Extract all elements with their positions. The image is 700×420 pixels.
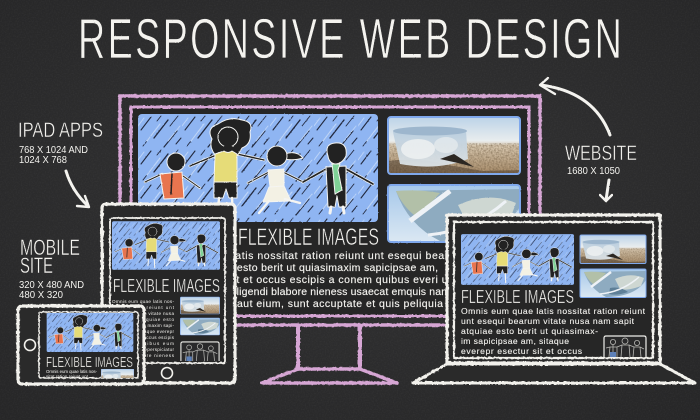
laptop heading: FLEXIBLE IMAGES (461, 287, 574, 307)
label: website: 1680 X 1050 (567, 166, 620, 177)
tablet body text: Omnis eum quae latis nos- (112, 299, 174, 304)
tablet people frame (181, 342, 219, 361)
tablet body text: ligendi blabore nieness (112, 353, 175, 358)
label: iPad apps (18, 119, 103, 166)
label: iPad apps: 1024 X 768 (19, 155, 67, 166)
phone body text (46, 369, 98, 379)
title: RESPONSIVE WEB DESIGN (78, 7, 622, 71)
monitor frame and stand (120, 96, 540, 383)
laptop body text: im sapicipsae am, sitaque (461, 336, 569, 346)
label: website (565, 142, 637, 177)
laptop body text: Omnis eum quae latis nossitat ration reiunt (461, 306, 646, 316)
tablet home button (162, 368, 172, 378)
label: mobile site: 320 X 480 AND (19, 280, 84, 291)
tablet body text: a conem quibus eum (112, 341, 174, 346)
phone body text: Omnis eum quae latis nos- (46, 369, 98, 374)
tablet body text (112, 299, 175, 358)
phone body text: sitat ration reiunt unt (46, 374, 89, 379)
monitor body text: tempora eligendi blabore nieness usaecat emquis nam (188, 286, 450, 298)
monitor body text: Omnis eum quae latis nossitat ration reiunt unt esequi bearum (141, 250, 464, 262)
tablet body text: nam sapit atquiae esto (112, 317, 174, 322)
tablet body text: eprehenderit reperspiciatur (112, 347, 174, 352)
tablet body (102, 204, 235, 383)
laptop photo: globe (580, 269, 646, 298)
tablet body text: sitat ration reiunt unt (112, 305, 175, 310)
monitor photo: desert (388, 117, 520, 174)
monitor body text (141, 250, 464, 310)
monitor photo: globe (388, 185, 520, 242)
tablet body text: berit ut quiasim maxim sapi- (112, 323, 174, 328)
phone body (18, 306, 144, 384)
tablet body text: esectur sit et occus escipis (112, 335, 175, 340)
panel: desktop monitor (120, 96, 540, 383)
laptop body text (461, 306, 646, 356)
label: mobile site (19, 235, 84, 301)
laptop body text: atquiae esto berit ut quiasimax- (461, 326, 598, 336)
tablet body text: esequi bearum vitate nusa (112, 311, 174, 316)
tablet heading: FLEXIBLE IMAGES (113, 276, 220, 296)
laptop photo: desert (580, 235, 646, 264)
label: mobile site: MOBILE (20, 235, 80, 260)
laptop people frame (604, 336, 646, 357)
phone hero image (47, 313, 133, 352)
laptop hero image (461, 234, 574, 285)
panel: tablet (102, 204, 235, 383)
phone heading: FLEXIBLE IMAGES (46, 355, 133, 371)
laptop body text: everepr esectur sit et occus (461, 346, 582, 356)
panel: laptop (413, 215, 695, 383)
monitor hero image (138, 114, 378, 222)
panel: phone (18, 306, 144, 384)
monitor body text: atquiae esto berit ut quiasimaxim sapicipsae am, (197, 262, 438, 274)
phone photo (101, 369, 134, 378)
tablet body text: cipsae am, sitaque everepr (112, 329, 174, 334)
tablet hero image (112, 221, 220, 270)
label: mobile site: SITE (20, 253, 53, 278)
arrow: to monitor (540, 78, 610, 135)
phone home button (24, 340, 36, 350)
arrow: to laptop (600, 180, 612, 201)
monitor body text: aut eium, sunt accuptate et quis peliquia (237, 298, 443, 310)
monitor heading: FLEXIBLE IMAGES (238, 224, 379, 251)
tablet photo: desert (180, 297, 220, 314)
label: iPad apps: IPAD APPS (18, 119, 103, 142)
laptop body (413, 215, 695, 383)
arrow: to tablet (66, 171, 89, 207)
monitor body text: everepr esectur sit et occus escipis a conem quibus everi ut (144, 274, 451, 286)
laptop body text: unt esequi bearum vitate nusa nam sapit (461, 316, 635, 326)
tablet photo: globe (180, 318, 220, 335)
label: website: WEBSITE (565, 142, 637, 165)
label: iPad apps: 768 X 1024 AND (19, 145, 88, 156)
label: mobile site: 480 X 320 (19, 290, 63, 301)
